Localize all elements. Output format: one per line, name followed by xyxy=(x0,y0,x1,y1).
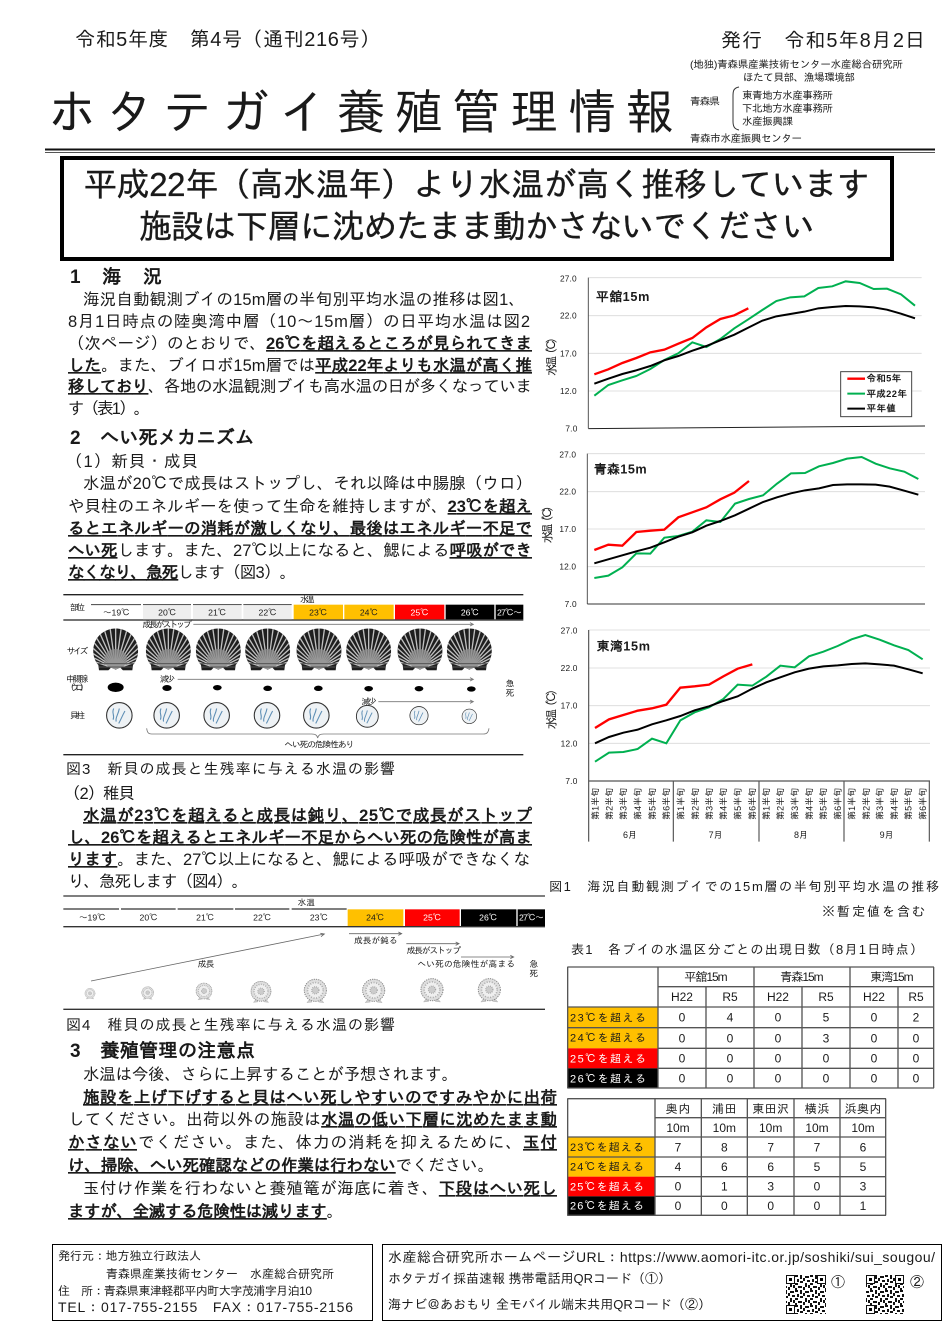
figure 4: juvenile shell diagram: 死 xyxy=(529,968,538,978)
publisher list: 東青地方水産事務所 xyxy=(742,90,834,102)
table 1b: buoys at 10m: 奥内 xyxy=(666,1102,690,1116)
table 1b: buoys at 10m: 10m xyxy=(759,1121,782,1135)
chart: Aomori 15m: 17.0 xyxy=(559,524,576,534)
table 1b: buoys at 10m: 23℃を超える xyxy=(570,1141,644,1154)
chart: Hiradate 15m: 平舘15m xyxy=(596,289,649,304)
section 2-2: juvenile shells: （2）稚貝 xyxy=(64,785,135,803)
table 1: buoys at 15m: H22 xyxy=(767,990,789,1004)
table 1b: buoys at 10m: 0 xyxy=(814,1180,821,1194)
table 1: buoys at 15m: 0 xyxy=(727,1072,734,1086)
x-axis half-month labels: 第1半旬 xyxy=(847,788,857,820)
figure 4: juvenile shell diagram: 21℃ xyxy=(196,913,214,923)
figure 4 caption: 図4 稚貝の成長と生残率に与える水温の影響 xyxy=(66,1017,395,1034)
x-axis half-month labels: 第2半旬 xyxy=(690,788,700,820)
table 1b: buoys at 10m: 25℃を超える xyxy=(570,1180,644,1193)
notice box xyxy=(62,158,892,259)
table 1b: buoys at 10m: 10m xyxy=(713,1121,736,1135)
figure 4: juvenile shell diagram: 20℃ xyxy=(140,913,158,923)
figure 3: new shell diagram xyxy=(63,595,523,755)
table 1b: buoys at 10m: 0 xyxy=(814,1199,821,1213)
x-axis half-month labels: 第6半旬 xyxy=(747,788,757,820)
table 1: buoys at 15m: 0 xyxy=(679,1031,686,1045)
x-axis half-month labels: 第5半旬 xyxy=(904,788,914,820)
table 1b: buoys at 10m: 10m xyxy=(666,1121,690,1135)
provisional note: ※暫定値を含む xyxy=(822,904,925,919)
table 1b: buoys at 10m: 0 xyxy=(675,1199,682,1213)
x-axis half-month labels: 第6半旬 xyxy=(918,788,928,820)
legend: 平年値 xyxy=(867,403,896,414)
figure 4: juvenile shell diagram: 水温 xyxy=(298,897,315,907)
table 1b: buoys at 10m: 東田沢 xyxy=(752,1102,789,1116)
chart: Aomori 15m: 水温（℃） xyxy=(540,500,554,543)
section 2: mortality mechanism: へい死します。また、27℃以上になると、鰓による呼吸ができ xyxy=(68,541,532,560)
table 1b: buoys at 10m: 6 xyxy=(721,1160,728,1174)
table 1b: buoys at 10m: 浦田 xyxy=(712,1102,737,1116)
table 1: buoys at 15m: 0 xyxy=(775,1011,782,1025)
table 1: buoys at 15m: 0 xyxy=(871,1072,878,1086)
chart: Higashi-wan 15m xyxy=(545,626,930,842)
icon: QR code 1 xyxy=(786,1275,826,1314)
figure 3: new shell diagram: 減少 xyxy=(362,696,377,706)
table 1b: buoys at 10m: 0 xyxy=(721,1199,728,1213)
table 1: buoys at 15m: R5 xyxy=(818,990,834,1004)
figure 3 caption: 図3 新貝の成長と生残率に与える水温の影響 xyxy=(66,761,395,778)
figure 1 caption: 図1 海況自動観測ブイでの15m層の半旬別平均水温の推移 xyxy=(549,879,939,894)
chart: Aomori 15m: 青森15m xyxy=(594,462,647,477)
table 1: buoys at 15m: 平舘15m xyxy=(684,970,728,984)
chart: Aomori 15m: 12.0 xyxy=(559,562,576,572)
table 1b: buoys at 10m: 5 xyxy=(814,1160,821,1174)
table 1: buoys at 15m: 2 xyxy=(913,1011,920,1025)
x-axis half-month labels: 第1半旬 xyxy=(590,788,600,820)
footer: publisher box: 住 所：青森県東津軽郡平内町大字茂浦字月泊10 xyxy=(58,1284,312,1298)
x-axis half-month labels: 第2半旬 xyxy=(861,788,871,820)
figure 3: new shell diagram: 水温 xyxy=(300,595,315,605)
section 2: mortality mechanism: なくなり、急死します（図3）。 xyxy=(68,563,296,582)
table 1: buoys at 15m: 0 xyxy=(823,1052,830,1066)
x-axis half-month labels: 第1半旬 xyxy=(762,788,772,820)
x-axis half-month labels: 第3半旬 xyxy=(875,788,885,820)
section 2-2: juvenile shells xyxy=(64,785,532,891)
figure 4: juvenile shell diagram: へい死の危険性が高まる xyxy=(417,959,515,969)
table 1b: buoys at 10m: 8 xyxy=(721,1140,728,1154)
figure 4: juvenile shell diagram: 23℃ xyxy=(310,913,328,923)
figure 4: juvenile shell diagram: 24℃ xyxy=(366,913,384,923)
section 1: sea conditions: （次ページ）のとおりで、26℃を超えるところが見られてきま xyxy=(68,334,532,353)
x-axis half-month labels: 9月 xyxy=(880,830,894,840)
figure 4: juvenile shell diagram: 成長がストップ xyxy=(407,946,461,956)
figure 4: juvenile shell diagram xyxy=(63,896,545,1009)
section 2: mortality mechanism: （1）新貝・成貝 xyxy=(66,453,198,471)
chart: Hiradate 15m: 水温（℃） xyxy=(544,332,558,376)
chart: Higashi-wan 15m: 7.0 xyxy=(565,776,578,786)
table 1b: buoys at 10m: 10m xyxy=(805,1121,829,1135)
x-axis half-month labels: 第2半旬 xyxy=(776,788,786,820)
publisher list: 青森県 xyxy=(690,96,720,108)
table 1b: buoys at 10m: 24℃を超える xyxy=(570,1160,644,1173)
table 1: buoys at 15m: 0 xyxy=(679,1072,686,1086)
section 1: sea conditions: す（表1）。 xyxy=(68,400,150,418)
x-axis half-month labels: 第6半旬 xyxy=(662,788,672,820)
publisher list: (地独)青森県産業技術センター水産総合研究所 xyxy=(690,59,904,71)
section 2-2: juvenile shells: り、急死します（図4）。 xyxy=(68,873,248,891)
icon: QR code 2 xyxy=(866,1275,904,1314)
table 1b: buoys at 10m: 7 xyxy=(675,1140,682,1154)
chart: Hiradate 15m and Aomori 15m xyxy=(540,273,925,609)
chart: Hiradate 15m: 27.0 xyxy=(560,273,577,283)
section 3: culture management notes: ますが、全滅する危険性は減ります。 xyxy=(68,1202,343,1221)
figure 4: juvenile shell diagram: 22℃ xyxy=(253,913,271,923)
section 1: sea conditions xyxy=(68,266,532,418)
figure 3: new shell diagram: 26℃ xyxy=(461,607,479,617)
chart: Hiradate 15m: 12.0 xyxy=(560,386,577,396)
footer: website and QR box: 水産総合研究所ホームページURL：https://www.aomori-itc.or.jp/soshiki/sui_sougou/ xyxy=(388,1249,935,1265)
table 1: buoys at 15m: 0 xyxy=(913,1072,920,1086)
legend xyxy=(841,372,912,417)
figure 4: juvenile shell diagram: 成長が鈍る xyxy=(354,936,398,946)
chart: Higashi-wan 15m: 22.0 xyxy=(561,663,578,673)
figure 3: new shell diagram: 22℃ xyxy=(259,607,277,617)
table 1: buoys at 15m: 青森15m xyxy=(780,970,824,984)
legend: 平成22年 xyxy=(867,388,907,399)
chart: Hiradate 15m: 7.0 xyxy=(565,423,578,433)
x-axis half-month labels: 第6半旬 xyxy=(833,788,843,820)
issue number: 令和5年度 第4号（通刊216号） xyxy=(75,29,380,51)
footer: publisher box xyxy=(52,1244,372,1320)
figure 3: new shell diagram: 減少 xyxy=(160,674,175,684)
section 1: sea conditions: した。また、ブイロボ15m層では平成22年よりも水温が高く推 xyxy=(68,356,532,375)
table 1b: buoys at 10m: 6 xyxy=(860,1140,867,1154)
table 1: buoys at 15m: 0 xyxy=(913,1031,920,1045)
chart: Higashi-wan 15m: 水温（℃） xyxy=(545,683,559,729)
notice box: 平成22年（高水温年）より水温が高く推移しています xyxy=(84,166,870,203)
figure 3: new shell diagram: 死 xyxy=(506,688,515,698)
footer: website and QR box: ① xyxy=(831,1274,845,1290)
footer: website and QR box xyxy=(382,1244,942,1320)
table 1: buoys at 15m: 5 xyxy=(823,1011,830,1025)
chart: Aomori 15m: 22.0 xyxy=(559,487,576,497)
section 1: sea conditions: 海況自動観測ブイの15m層の半旬別平均水温の推移は図1、 xyxy=(83,291,525,309)
section 3: culture management notes: 施設を上げ下げすると貝はへい死しやすいのですみやかに出荷 xyxy=(83,1088,557,1107)
table 1: buoys at 15m: R5 xyxy=(722,990,738,1004)
chart: Hiradate 15m xyxy=(544,273,925,433)
chart: Aomori 15m xyxy=(540,449,925,609)
figure 3: new shell diagram: ～19℃ xyxy=(103,607,130,617)
figure 4: juvenile shell diagram: 成長 xyxy=(198,959,215,969)
figure 4: juvenile shell diagram: 27℃～ xyxy=(519,913,544,923)
table 1b: buoys at 10m: 4 xyxy=(675,1160,682,1174)
x-axis half-month labels xyxy=(590,788,928,840)
figure 3: new shell diagram: 20℃ xyxy=(158,607,176,617)
table 1b: buoys at 10m: 26℃を超える xyxy=(570,1200,644,1213)
title: ホタテガイ養殖管理情報 xyxy=(48,87,674,140)
table 1: buoys at 15m: R5 xyxy=(908,990,924,1004)
figure 3: new shell diagram: 貝柱 xyxy=(70,711,85,721)
table 1 caption: 表1 各ブイの水温区分ごとの出現日数（8月1日時点） xyxy=(571,942,923,957)
figure 3: new shell diagram: 21℃ xyxy=(208,607,226,617)
footer: publisher box: 発行元：地方独立行政法人 xyxy=(58,1249,201,1263)
section 2-2: juvenile shells: 水温が23℃を超えると成長は鈍り、25℃で成長がストップ xyxy=(83,806,532,825)
section 2: mortality mechanism: るとエネルギーの消耗が激しくなり、最後はエネルギー不足で xyxy=(68,519,532,538)
table 1b: buoys at 10m: 6 xyxy=(767,1160,774,1174)
table 1b: buoys at 10m: 7 xyxy=(814,1140,821,1154)
section 3: culture management notes: してください。出荷以外の施設は水温の低い下層に沈めたまま動 xyxy=(68,1110,557,1129)
x-axis half-month labels: 第1半旬 xyxy=(676,788,686,820)
section 1: sea conditions: 8月1日時点の陸奥湾中層（10～15m層）の日平均水温は図2 xyxy=(68,313,530,331)
table 1: buoys at 15m: 0 xyxy=(727,1052,734,1066)
chart: Hiradate 15m: 22.0 xyxy=(560,311,577,321)
section 2: mortality mechanism: 2 へい死メカニズム xyxy=(70,427,254,449)
figure 3: new shell diagram: 24℃ xyxy=(360,607,378,617)
table 1: buoys at 15m: 23℃を超える xyxy=(570,1011,646,1024)
x-axis half-month labels: 第3半旬 xyxy=(704,788,714,820)
x-axis half-month labels: 7月 xyxy=(709,830,723,840)
section 3: culture management notes: 玉付け作業を行わないと養殖篭が海底に着き、下段はへい死し xyxy=(83,1179,557,1198)
table 1b: buoys at 10m: 横浜 xyxy=(805,1102,829,1116)
x-axis half-month labels: 第4半旬 xyxy=(719,788,729,820)
footer: website and QR box: ホタテガイ採苗速報 携帯電話用QRコード（①） xyxy=(388,1271,671,1286)
x-axis half-month labels: 第3半旬 xyxy=(619,788,629,820)
footer: publisher box: 青森県産業技術センター 水産総合研究所 xyxy=(106,1267,334,1281)
chart: Hiradate 15m: 17.0 xyxy=(560,348,577,358)
publisher list xyxy=(690,59,904,145)
x-axis half-month labels: 6月 xyxy=(623,830,637,840)
table 1b: buoys at 10m: 1 xyxy=(860,1199,867,1213)
table 1b: buoys at 10m: 10m xyxy=(851,1121,875,1135)
legend: 令和5年 xyxy=(867,373,902,384)
section 1: sea conditions: 移しており、各地の水温観測ブイも高水温の日が多くなっていま xyxy=(68,378,532,396)
table 1: buoys at 15m: 24℃を超える xyxy=(570,1032,646,1045)
table 1b: buoys at 10m: 5 xyxy=(860,1160,867,1174)
table 1: buoys at 15m: 東湾15m xyxy=(870,970,914,984)
table 1b: buoys at 10m: 0 xyxy=(767,1199,774,1213)
x-axis half-month labels: 第5半旬 xyxy=(647,788,657,820)
footer: website and QR box: ② xyxy=(910,1274,924,1290)
section 2-2: juvenile shells: し、26℃を超えるとエネルギー不足からへい死の危険性が高ま xyxy=(68,828,532,847)
table 1b: buoys at 10m: 3 xyxy=(860,1180,867,1194)
figure 3: new shell diagram: へい死の危険性あり xyxy=(284,739,354,749)
figure 4: juvenile shell diagram: 26℃ xyxy=(479,913,497,923)
x-axis half-month labels: 第2半旬 xyxy=(605,788,615,820)
section 2-2: juvenile shells: ります。また、27℃以上になると、鰓による呼吸ができなくな xyxy=(68,851,530,869)
figure 3: new shell diagram: サイズ xyxy=(67,646,89,656)
figure 4: juvenile shell diagram: ～19℃ xyxy=(79,913,106,923)
table 1b: buoys at 10m: 1 xyxy=(721,1180,728,1194)
x-axis half-month labels: 第3半旬 xyxy=(790,788,800,820)
section 2: mortality mechanism: や貝柱のエネルギーを使って生命を維持しますが、23℃を超え xyxy=(68,497,532,516)
table 1: buoys at 15m: 25℃を超える xyxy=(570,1052,646,1065)
publisher list: 水産振興課 xyxy=(742,116,794,128)
table 1b: buoys at 10m xyxy=(567,1099,886,1216)
issue date: 発行 令和5年8月2日 xyxy=(721,30,925,52)
section 2: mortality mechanism: 水温が20℃で成長はストップし、それ以降は中腸腺（ウロ） xyxy=(83,474,532,493)
figure 3: new shell diagram: 25℃ xyxy=(411,607,429,617)
x-axis half-month labels: 8月 xyxy=(794,830,808,840)
figure 3: new shell diagram: 23℃ xyxy=(309,607,327,617)
table 1b: buoys at 10m: 7 xyxy=(767,1140,774,1154)
chart: Higashi-wan 15m: 東湾15m xyxy=(597,638,650,653)
section 3: culture management notes xyxy=(68,1040,557,1221)
notice box: 施設は下層に沈めたまま動かさないでください xyxy=(139,208,815,245)
figure 3: new shell diagram: 急 xyxy=(506,679,515,689)
table 1: buoys at 15m: 0 xyxy=(775,1072,782,1086)
publisher list: 下北地方水産事務所 xyxy=(742,103,834,115)
section 3: culture management notes: 水温は今後、さらに上昇することが予想されます。 xyxy=(83,1066,458,1084)
x-axis half-month labels: 第5半旬 xyxy=(733,788,743,820)
section 3: culture management notes: かさないでください。また、体力の消耗を抑えるために、玉付 xyxy=(68,1134,557,1152)
figure 4: juvenile shell diagram: 25℃ xyxy=(423,913,441,923)
table 1: buoys at 15m: 26℃を超える xyxy=(570,1072,646,1085)
figure 4: juvenile shell diagram: 急 xyxy=(529,959,538,969)
publisher list: ほたて貝部、漁場環境部 xyxy=(743,72,855,84)
x-axis half-month labels: 第4半旬 xyxy=(633,788,643,820)
table 1: buoys at 15m: 0 xyxy=(679,1052,686,1066)
table 1b: buoys at 10m: 3 xyxy=(767,1180,774,1194)
chart: Higashi-wan 15m: 12.0 xyxy=(561,738,578,748)
figure 3: new shell diagram: 27℃～ xyxy=(497,607,522,617)
footer: website and QR box: 海ナビ＠あおもり 全モバイル端末共用QRコード（②） xyxy=(388,1297,711,1312)
chart: Aomori 15m: 27.0 xyxy=(559,449,576,459)
x-axis half-month labels: 第5半旬 xyxy=(819,788,829,820)
figure 3: new shell diagram: 中腸腺 xyxy=(66,674,89,684)
table 1b: buoys at 10m: 0 xyxy=(675,1180,682,1194)
footer: publisher box: TEL：017-755-2155 FAX：017-755-2156 xyxy=(58,1299,353,1315)
figure 3: new shell diagram: 成長がストップ xyxy=(142,620,192,630)
chart: Higashi-wan 15m: 27.0 xyxy=(561,626,578,636)
table 1: buoys at 15m: 0 xyxy=(727,1031,734,1045)
section 3: culture management notes: 3 養殖管理の注意点 xyxy=(70,1040,255,1062)
table 1: buoys at 15m xyxy=(567,967,934,1088)
table 1: buoys at 15m: 0 xyxy=(871,1011,878,1025)
section 2: mortality mechanism xyxy=(66,427,532,582)
table 1: buoys at 15m: 0 xyxy=(775,1031,782,1045)
table 1: buoys at 15m: 4 xyxy=(727,1011,734,1025)
section 1: sea conditions: 1 海 況 xyxy=(70,266,162,288)
table 1: buoys at 15m: 0 xyxy=(823,1072,830,1086)
x-axis half-month labels: 第4半旬 xyxy=(804,788,814,820)
x-axis half-month labels: 第4半旬 xyxy=(889,788,899,820)
table 1: buoys at 15m: 0 xyxy=(871,1031,878,1045)
table 1: buoys at 15m: 0 xyxy=(871,1052,878,1066)
chart: Higashi-wan 15m: 17.0 xyxy=(561,701,578,711)
chart: Aomori 15m: 7.0 xyxy=(565,599,577,609)
table 1: buoys at 15m: 3 xyxy=(823,1031,830,1045)
figure 3: new shell diagram: 部位 xyxy=(70,603,85,613)
table 1: buoys at 15m: H22 xyxy=(671,990,693,1004)
table 1: buoys at 15m: 0 xyxy=(913,1052,920,1066)
section 3: culture management notes: け、掃除、へい死確認などの作業は行わないでください。 xyxy=(68,1156,494,1175)
table 1: buoys at 15m: H22 xyxy=(863,990,885,1004)
table 1: buoys at 15m: 0 xyxy=(775,1052,782,1066)
table 1: buoys at 15m: 0 xyxy=(679,1011,686,1025)
publisher list: 青森市水産振興センター xyxy=(690,133,802,145)
table 1b: buoys at 10m: 浜奥内 xyxy=(845,1102,881,1116)
figure 3: new shell diagram: （ウロ） xyxy=(66,683,88,693)
